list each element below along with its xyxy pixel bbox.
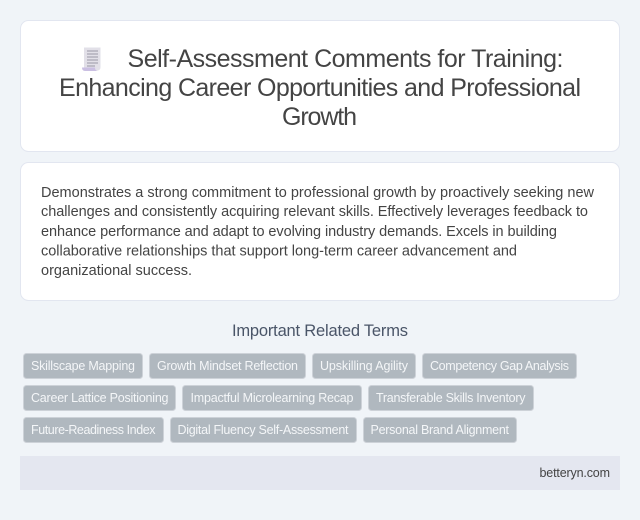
icon: scroll document — [82, 48, 100, 71]
tag: Personal Brand Alignment: Personal Brand Alignment — [370, 423, 510, 437]
tag: Impactful Microlearning Recap: Impactful Microlearning Recap — [190, 391, 354, 405]
panel: summary paragraph: collaborative relationships that support long-term career advancement and — [41, 244, 517, 260]
footer: betteryn.com — [540, 466, 610, 480]
tag: Career Lattice Positioning: Career Lattice Positioning — [31, 391, 169, 405]
title text: Enhancing Career Opportunities and Professional — [59, 74, 581, 102]
panel: summary paragraph: enhance performance and adapt to evolving industry demands. Excels in building — [41, 224, 557, 240]
panel: summary paragraph: organizational success. — [41, 263, 192, 279]
panel: summary paragraph: challenges and consistently acquiring relevant skills. Effectively leverages feedback to — [41, 204, 588, 220]
tag list — [24, 354, 576, 442]
panel: summary paragraph — [20, 162, 620, 300]
tag: Future-Readiness Index: Future-Readiness Index — [31, 423, 156, 437]
title text — [59, 45, 581, 131]
tag: Upskilling Agility: Upskilling Agility — [320, 359, 409, 373]
tag: Impactful Microlearning Recap — [182, 386, 362, 410]
tag: Digital Fluency Self-Assessment: Digital Fluency Self-Assessment — [178, 423, 349, 437]
tag: Future-Readiness Index — [24, 418, 164, 442]
title text: Self-Assessment Comments for Training: — [128, 45, 564, 73]
tag: Transferable Skills Inventory: Transferable Skills Inventory — [376, 391, 526, 405]
tag: Growth Mindset Reflection — [150, 354, 306, 378]
tag: Personal Brand Alignment — [364, 418, 516, 442]
tag: Skillscape Mapping — [24, 354, 142, 378]
title text: Growth — [282, 103, 357, 131]
footer — [20, 456, 620, 490]
tag: Upskilling Agility — [312, 354, 416, 378]
tag: Transferable Skills Inventory — [368, 386, 534, 410]
panel: title — [20, 20, 620, 152]
tag: Career Lattice Positioning — [24, 386, 176, 410]
panel: summary paragraph: Demonstrates a strong commitment to professional growth by proactively seeking new — [41, 185, 595, 201]
tag: Digital Fluency Self-Assessment — [170, 418, 356, 442]
heading: Important Related Terms: Important Related Terms — [232, 322, 408, 340]
tag: Competency Gap Analysis: Competency Gap Analysis — [430, 359, 569, 373]
tag: Skillscape Mapping: Skillscape Mapping — [31, 359, 135, 373]
tag: Growth Mindset Reflection: Growth Mindset Reflection — [157, 359, 298, 373]
tag: Competency Gap Analysis — [422, 354, 576, 378]
